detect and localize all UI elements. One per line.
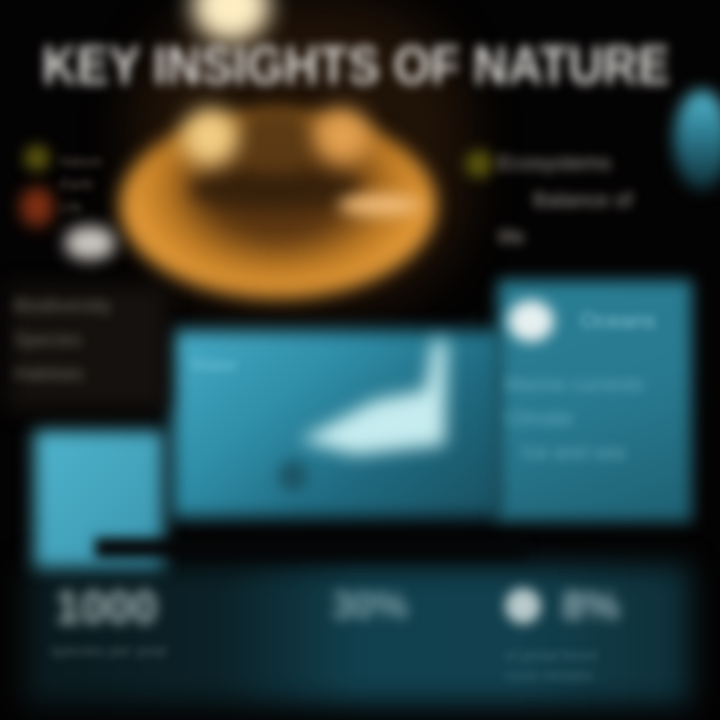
title: KEY INSIGHTS OF NATURE: [42, 36, 670, 96]
panel: warm background glow behind bowl: [130, 0, 470, 310]
icon: left glowing orb: [182, 108, 238, 166]
text block: right panel body: Marine currents: [505, 374, 644, 396]
stat: middle value: 30%: [332, 585, 408, 627]
stat: left value: 1000: [55, 581, 157, 633]
text block: right panel body: Climate: [505, 408, 573, 430]
text block: upper left grey: Earth: [60, 176, 93, 192]
icon: white circle right panel: [508, 300, 554, 342]
illustration: upper bowl shadow: [235, 110, 315, 170]
panel: dark left text block: [8, 285, 168, 410]
text block: left dark panel: Habitats: [14, 364, 84, 385]
text block: bottom right caption: cover remains: [505, 667, 593, 683]
text block: left dark panel: [12, 295, 112, 385]
text block: right panel body: [504, 374, 644, 464]
chart: white wedge in main panel: [296, 328, 460, 468]
text block: upper right: Ecosystems: [498, 152, 611, 175]
text block: upper right: Balance of: [533, 189, 632, 212]
stat: right value: 8%: [562, 584, 620, 628]
icon: glowing top lamp: [192, 0, 270, 42]
illustration: dark bowl centre: [190, 168, 360, 210]
text block: upper left grey: Nature: [60, 153, 102, 169]
text block: left dark panel: Species: [14, 330, 82, 351]
text block: left dark panel: Biodiversity: [14, 296, 111, 317]
text block: upper left grey: [58, 153, 103, 215]
icon: teal pin top right: [674, 90, 720, 190]
panel: right teal panel: [498, 280, 692, 522]
icon: white circle bottom right: [505, 588, 541, 624]
icon: yellow mark right: [465, 150, 493, 178]
icon: white blob left: [65, 226, 115, 260]
text block: bottom right caption: [505, 647, 597, 683]
text block: bottom right caption: of global forest: [505, 647, 597, 663]
text block: upper left grey: Life: [60, 199, 83, 215]
panel: left teal panel: [34, 430, 164, 568]
panel: large teal main panel: [172, 330, 502, 518]
panel: bottom gradient band: [25, 565, 690, 705]
text block: upper right: life: [498, 226, 525, 249]
text block: upper right: [494, 150, 637, 249]
icon: dark mark in main panel: [278, 460, 308, 492]
icon: left yellow and red marks: [10, 138, 64, 236]
text block: main panel heading: Water: [190, 355, 237, 375]
text block: left stat caption: species per year: [50, 643, 167, 660]
illustration: orange glowing bowl: [120, 112, 436, 298]
icon: right glowing orb: [314, 108, 370, 164]
text block: right panel heading: Oceans: [580, 308, 656, 333]
divider bar: [95, 538, 525, 558]
text block: right panel body: Ice and sea: [522, 442, 625, 464]
highlight: bowl right glint: [338, 194, 422, 216]
